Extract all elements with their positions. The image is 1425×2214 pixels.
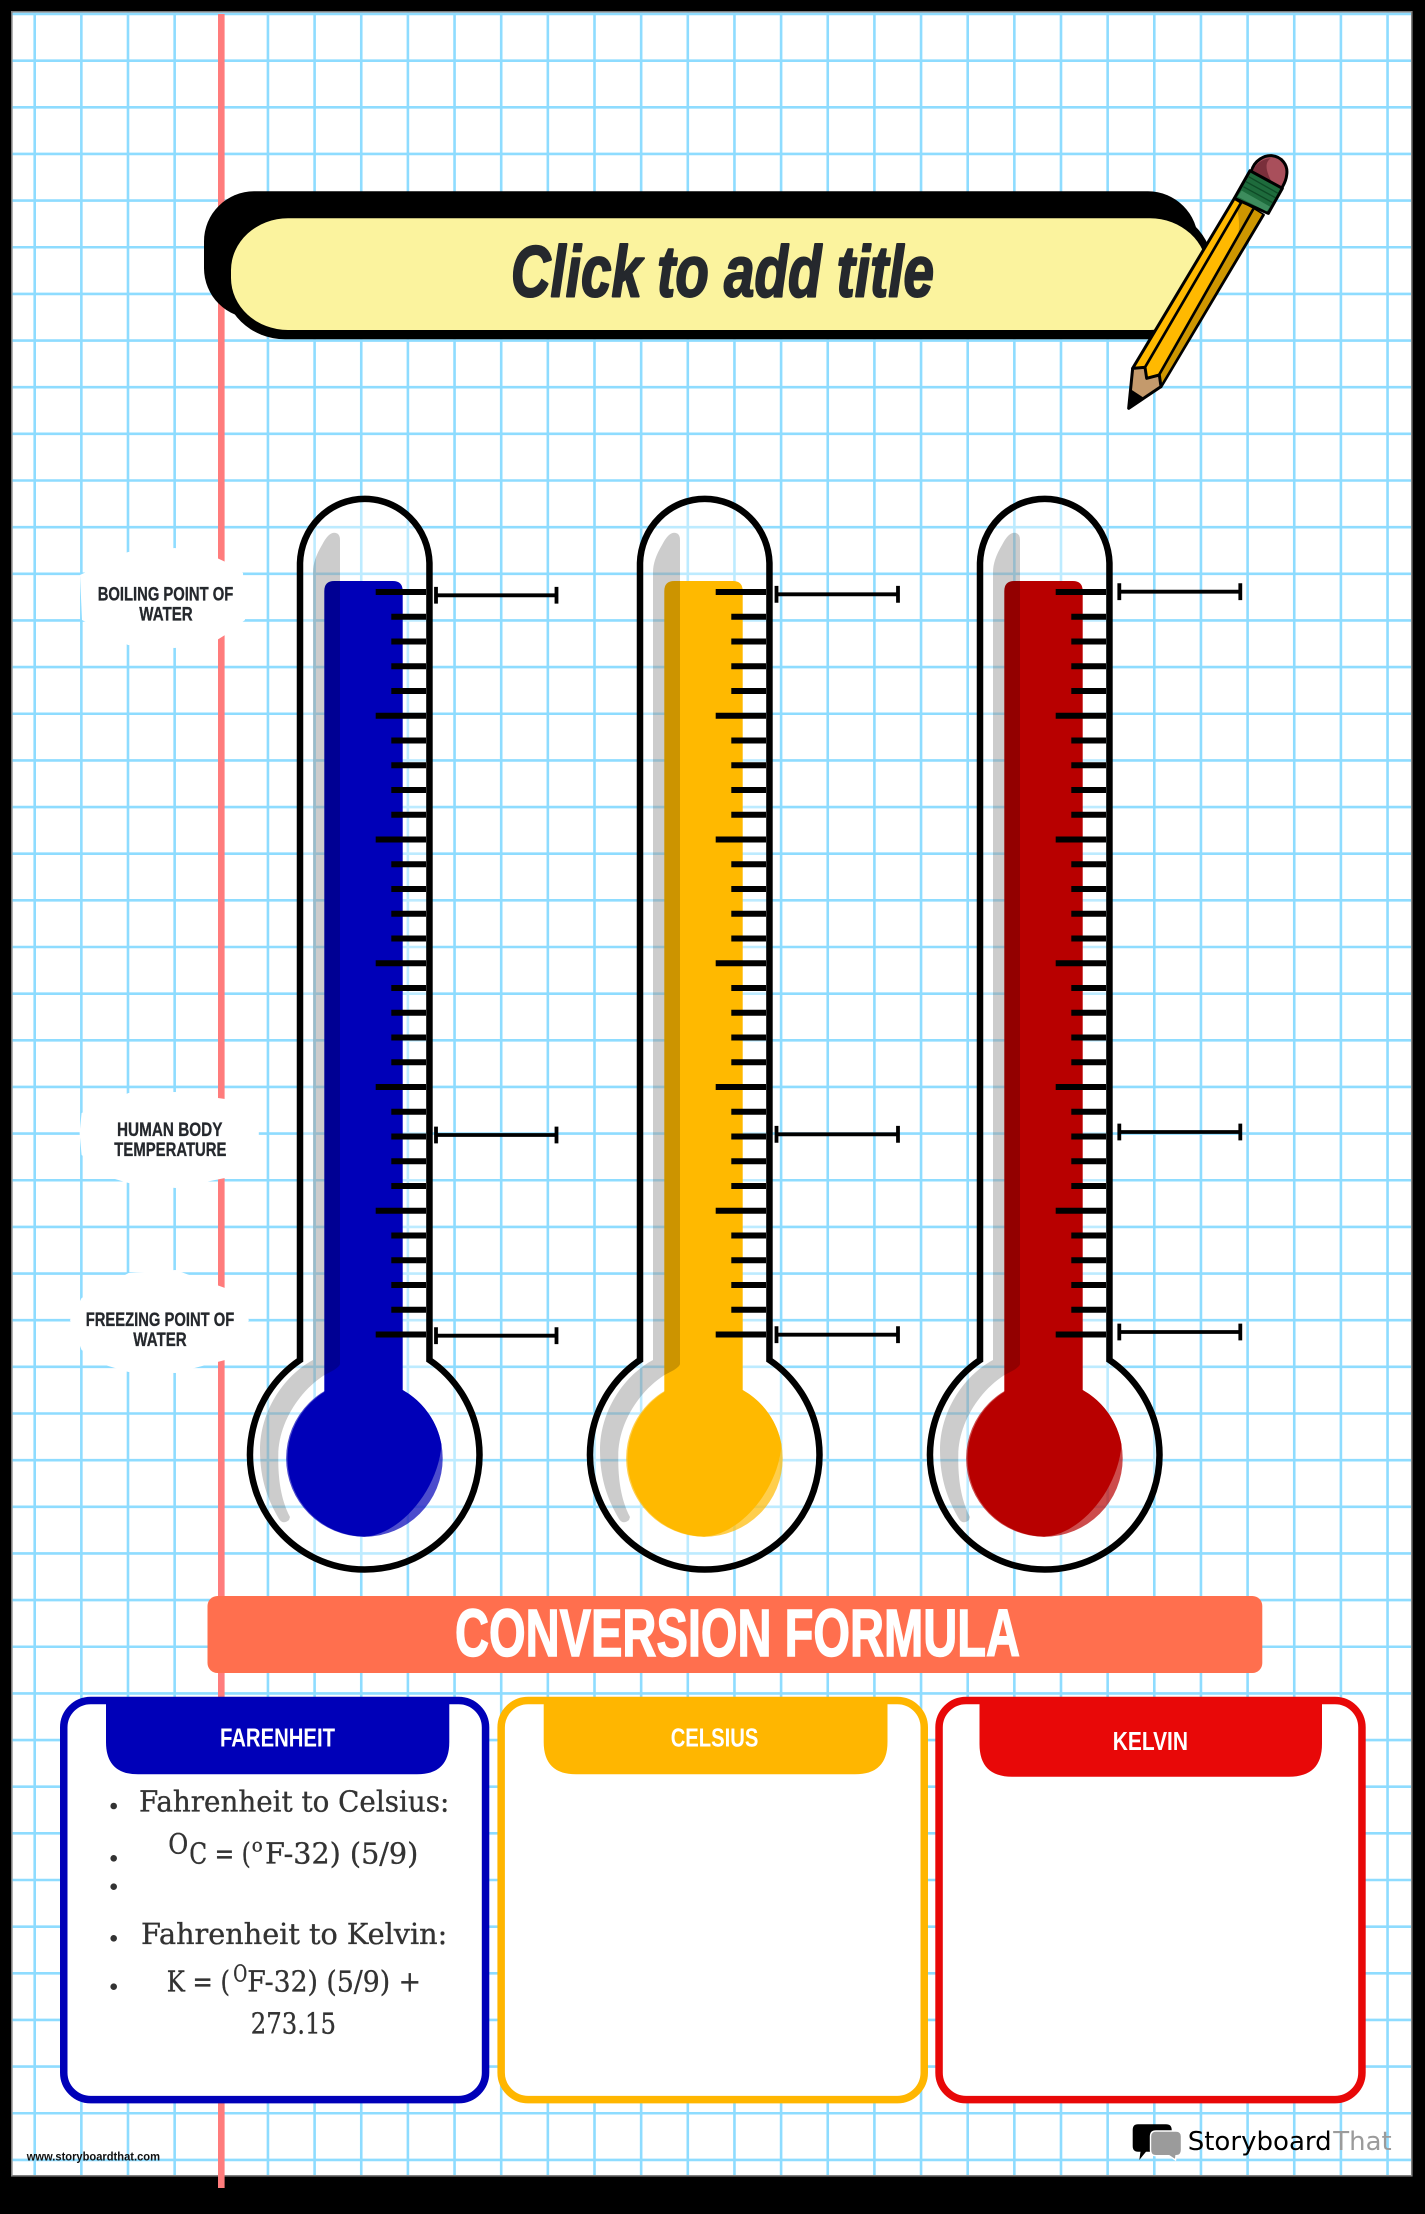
yellow marker: freezing xyxy=(776,1326,898,1343)
yellow marker: boiling xyxy=(776,586,898,603)
marker: boiling xyxy=(436,587,556,604)
pencil body xyxy=(1133,198,1263,387)
thermometer: yellow xyxy=(590,499,898,1570)
pencil wood tip xyxy=(1129,367,1161,408)
formula text: O xyxy=(168,1827,188,1860)
banner back shadow xyxy=(204,191,1198,318)
fahrenheit card frame xyxy=(64,1700,486,2100)
storyboardthat logo xyxy=(1133,2124,1392,2160)
red margin line xyxy=(218,14,225,2188)
formula text: Fahrenheit to Kelvin: xyxy=(141,1917,447,1951)
thermometer: blue xyxy=(250,499,556,1570)
formula text: K = ( xyxy=(167,1965,230,1999)
panel: fahrenheit xyxy=(64,1697,486,2100)
marker: freezing xyxy=(436,1327,556,1344)
boiling label second line: WATER xyxy=(139,605,193,626)
banner yellow fill xyxy=(231,218,1207,330)
human body label blob xyxy=(80,1092,259,1188)
formula text: F-32) (5/9) xyxy=(265,1836,418,1870)
pencil ferrule xyxy=(1234,171,1282,213)
label: human body temperature: TEMPERATURE xyxy=(114,1140,226,1161)
marker: body temperature xyxy=(436,1127,556,1143)
human body label text: HUMAN BODY xyxy=(117,1120,223,1141)
label: boiling point of water xyxy=(80,548,245,648)
celsius heading: CELSIUS xyxy=(671,1725,758,1753)
formula text: O xyxy=(233,1962,247,1988)
banner front outline xyxy=(223,208,1213,339)
formula text xyxy=(139,1785,449,2040)
label: freezing point of water xyxy=(70,1270,249,1373)
freezing label text: FREEZING POINT OF xyxy=(86,1310,234,1331)
pencil eraser xyxy=(1251,156,1287,188)
formula text: o xyxy=(252,1835,263,1857)
title text: Click to add title xyxy=(511,233,934,313)
red marker: boiling xyxy=(1119,583,1240,600)
label: freezing point of water: WATER xyxy=(133,1330,187,1351)
label: human body temperature xyxy=(80,1092,259,1188)
freezing label blob xyxy=(70,1270,249,1373)
formula text: Fahrenheit to Celsius: xyxy=(139,1785,449,1819)
conversion formula banner xyxy=(208,1596,1262,1673)
panel: celsius xyxy=(501,1697,924,2100)
fahrenheit tab xyxy=(106,1697,449,1774)
boiling label blob xyxy=(80,548,245,648)
bullets xyxy=(110,1803,117,1990)
kelvin heading: KELVIN xyxy=(1113,1728,1188,1756)
thermometer: red xyxy=(930,499,1240,1570)
red marker: freezing xyxy=(1119,1324,1240,1340)
storyboardthat logo: That xyxy=(1332,2127,1392,2157)
formula text: F-32) (5/9) + xyxy=(247,1965,421,1999)
boiling label text: BOILING POINT OF xyxy=(98,585,233,606)
red marker: body temperature xyxy=(1119,1124,1240,1140)
fahrenheit heading: FARENHEIT xyxy=(220,1725,335,1753)
celsius tab xyxy=(544,1697,888,1774)
panel: kelvin xyxy=(939,1697,1362,2100)
logo wordmark: Storyboard xyxy=(1188,2127,1332,2157)
kelvin card frame xyxy=(939,1700,1362,2100)
celsius card frame xyxy=(501,1700,924,2100)
kelvin tab xyxy=(980,1697,1322,1777)
banner heading: CONVERSION FORMULA xyxy=(455,1596,1020,1671)
formula text: 273.15 xyxy=(251,2006,336,2040)
banner bar xyxy=(208,1596,1262,1673)
logo speech bubbles xyxy=(1133,2124,1172,2160)
icon: pencil xyxy=(1129,156,1287,408)
yellow marker: body temperature xyxy=(776,1126,898,1143)
formula text: C = ( xyxy=(189,1836,251,1870)
title banner xyxy=(204,191,1213,339)
website credit: www.storyboardthat.com xyxy=(26,2150,160,2164)
